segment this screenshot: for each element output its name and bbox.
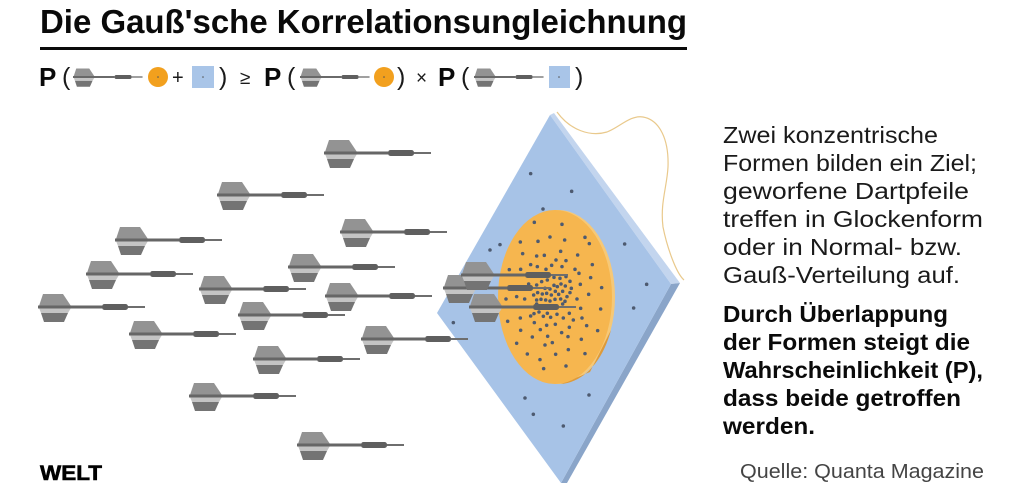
string [557,112,684,280]
description text: Gauß-Verteilung auf. [723,262,960,288]
dart 6 [324,140,431,168]
dart in target b [443,275,550,303]
formula: × [416,68,427,89]
hit dots [452,172,648,428]
dart 2 [129,321,236,349]
dart 3 [86,261,193,289]
formula [39,62,583,92]
dart 5 [217,182,324,210]
formula: P [264,62,281,92]
dart 14 [189,383,296,411]
bold statement [722,301,983,439]
orange disc [498,210,612,384]
dart 13 [253,346,360,374]
title: Die Gauß'sche Korrelationsungleichnung [40,3,687,40]
dart 1 [38,294,145,322]
description text: oder in Normal- bzw. [723,234,962,260]
dart 8 [288,254,395,282]
description text [723,122,983,288]
formula: ) [219,63,227,91]
bold statement: Durch Überlappung [723,301,948,327]
dart 10 [325,283,432,311]
bold statement: werden. [722,413,815,439]
board light edge [550,113,680,284]
formula: ≥ [240,68,250,89]
board face [437,115,671,483]
dart 7 [340,219,447,247]
dart 9 [199,276,306,304]
board dark edge [561,283,680,483]
description text: Formen bilden ein Ziel; [723,150,977,176]
bold statement: dass beide getroffen [723,385,961,411]
dart in target a [461,262,568,290]
formula: ( [287,63,296,91]
description text: geworfene Dartpfeile [723,178,969,204]
dart in target c [469,294,576,322]
formula: + [172,67,184,89]
description text: treffen in Glockenform [723,206,983,232]
logo: WELT: WELT [40,462,102,485]
formula: ) [575,63,583,91]
target board [437,113,680,483]
description text: Zwei konzentrische [723,122,938,148]
formula: P [438,62,455,92]
dart 11 [238,302,345,330]
formula: ( [62,63,71,91]
formula: ) [397,63,405,91]
dart 12 [361,326,468,354]
formula: P [39,62,56,92]
title rule [40,47,687,50]
bold statement: der Formen steigt die [723,329,970,355]
formula: ( [461,63,470,91]
source: Quelle: Quanta Magazine [740,461,984,483]
dart 4 [115,227,222,255]
bold statement: Wahrscheinlichkeit (P), [723,357,983,383]
disc rim [501,210,615,384]
dart 15 [297,432,404,460]
